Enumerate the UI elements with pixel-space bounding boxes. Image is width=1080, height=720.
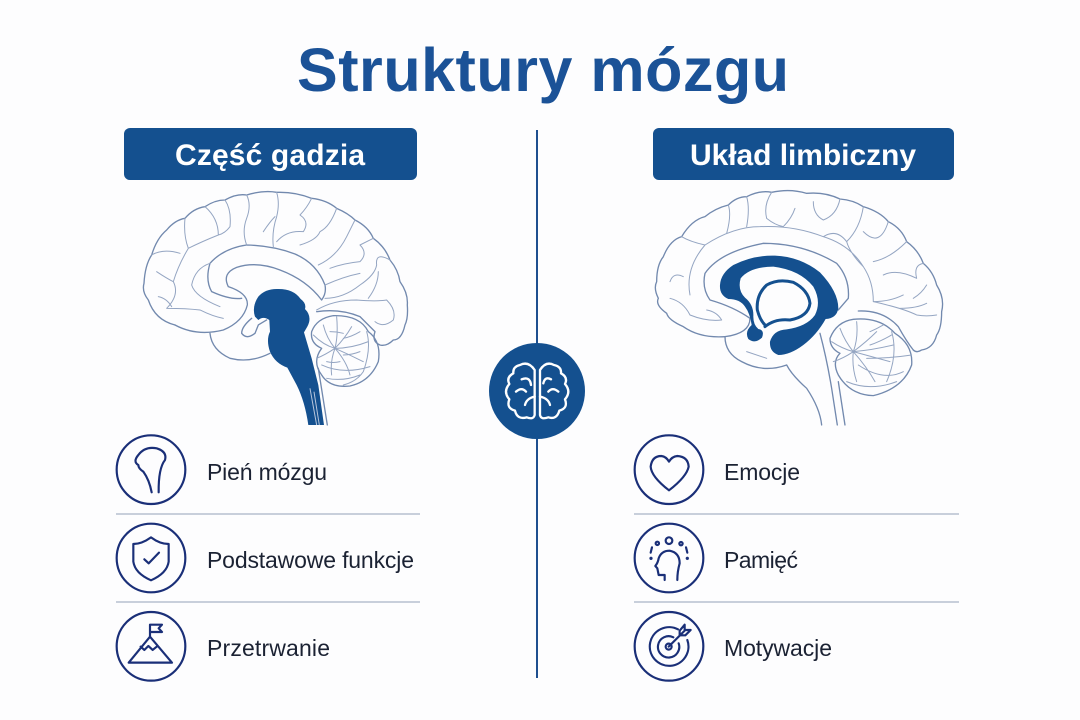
list item: Motywacje <box>635 612 832 681</box>
list item: Pamięć <box>635 524 798 592</box>
brainstem highlight <box>254 289 324 425</box>
icon: head with memory dots <box>649 537 689 580</box>
illustration: brain with limbic system highlighted <box>655 191 943 425</box>
icon: central brain badge <box>489 343 585 439</box>
list item: Motywacje: Motywacje <box>724 635 832 661</box>
panel: left column heading: Część gadzia <box>175 139 365 172</box>
icon: brainstem <box>135 448 165 492</box>
icon: shield with check <box>133 537 169 580</box>
cerebellum <box>311 316 379 386</box>
list item: Emocje <box>635 435 800 504</box>
icon: heart <box>651 456 689 490</box>
title: Struktury mózgu <box>297 36 789 104</box>
center divider line <box>536 130 538 678</box>
panel: right column heading <box>653 128 954 180</box>
list item: Przetrwanie: Przetrwanie <box>207 635 330 661</box>
cerebellum <box>830 319 912 396</box>
list item: Emocje: Emocje <box>724 459 800 485</box>
limbic system highlight <box>720 256 838 355</box>
list item: Podstawowe funkcje <box>117 524 414 592</box>
icon: mountain with flag <box>129 625 172 663</box>
list item: Podstawowe funkcje: Podstawowe funkcje <box>207 547 414 573</box>
list item: Przetrwanie <box>117 612 330 681</box>
panel: right column heading: Układ limbiczny <box>690 139 916 172</box>
icon: target with arrow <box>650 625 691 666</box>
panel: left column heading <box>124 128 417 180</box>
list item: Pień mózgu: Pień mózgu <box>207 459 327 485</box>
list item: Pamięć: Pamięć <box>724 547 798 573</box>
illustration: brain with brainstem highlighted <box>143 192 408 425</box>
list item: Pień mózgu <box>117 435 327 504</box>
